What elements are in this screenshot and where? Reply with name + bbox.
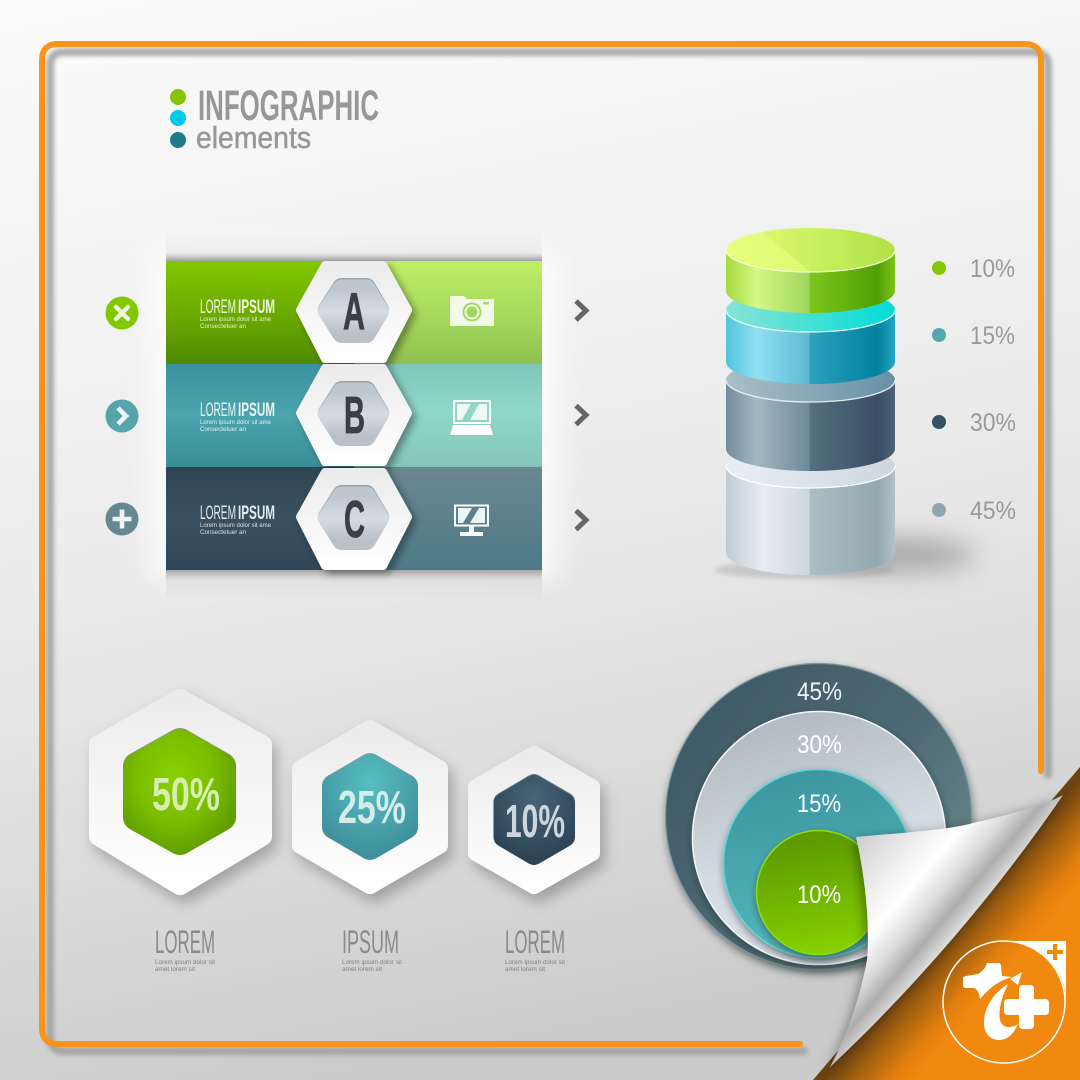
- row C icon: monitor: [455, 506, 488, 536]
- row B label: Consectetuer an: [200, 426, 246, 433]
- logo mark: t: [963, 963, 1012, 999]
- row B chevron: [576, 406, 586, 424]
- logo mark: arrow: [1010, 972, 1022, 985]
- caption LOREM 2: Lorem ipsum dolor sit: [505, 959, 565, 966]
- row B label: LOREM: [200, 400, 236, 421]
- panel: banner list: [106, 232, 586, 600]
- row C label: Consectetuer an: [200, 529, 246, 536]
- cylinder segment 10%: [726, 228, 895, 313]
- row B label: [200, 400, 275, 433]
- hexagon 25%: [301, 729, 439, 885]
- chart: nested circles: [666, 664, 972, 970]
- hexagon 10%: [476, 754, 592, 886]
- hexagon badge B: B: [344, 387, 365, 445]
- cylinder segment 45%: [726, 444, 895, 575]
- cylinder segment 30%: [726, 358, 895, 471]
- row B icon: next: [106, 400, 138, 432]
- circle 45%: [666, 664, 972, 970]
- row C icon: plus: [106, 502, 138, 536]
- legend 10%: [932, 255, 1015, 283]
- row A label: Consectetuer an: [200, 323, 246, 330]
- panel: hexagon percentages: [99, 699, 592, 973]
- hexagon 10%: 10%: [505, 795, 565, 847]
- circle 15%: [724, 770, 912, 958]
- row C label: [200, 503, 275, 536]
- hexagon badge C: [300, 472, 408, 566]
- hexagon 25%: 25%: [338, 781, 406, 833]
- row C label: Lorem ipsum dolor sit ame: [200, 522, 271, 529]
- legend 45%: 45%: [970, 497, 1016, 525]
- hexagon 50%: [99, 699, 262, 885]
- row B icon: laptop: [450, 401, 493, 435]
- caption IPSUM: IPSUM: [342, 924, 399, 960]
- legend 30%: [932, 409, 1016, 437]
- row A label: LOREM: [200, 297, 236, 318]
- caption LOREM: [155, 924, 215, 973]
- hexagon badge B: [300, 368, 408, 462]
- chart legend: [932, 255, 1016, 525]
- row B label: Lorem ipsum dolor sit ame: [200, 419, 271, 426]
- row C label: IPSUM: [238, 503, 275, 524]
- logo ring: [943, 941, 1065, 1063]
- caption LOREM: LOREM: [155, 924, 215, 960]
- caption LOREM 2: LOREM: [505, 924, 565, 960]
- circle 30%: 30%: [797, 731, 842, 759]
- caption IPSUM: amet lorem sit: [342, 966, 382, 973]
- legend 15%: [932, 322, 1015, 350]
- circle 10%: 10%: [797, 881, 841, 909]
- row C chevron: [576, 510, 586, 530]
- page curl: [830, 795, 1063, 1067]
- circle 10%: [756, 830, 880, 954]
- logo mark: plus: [1004, 985, 1049, 1029]
- legend 45%: [932, 497, 1016, 525]
- logo mark: stem: [984, 984, 1018, 1040]
- row A label: Lorem ipsum dolor sit ame: [200, 316, 271, 323]
- caption LOREM: amet lorem sit: [155, 966, 195, 973]
- row A: [106, 261, 586, 364]
- hexagon badge A: A: [343, 283, 365, 341]
- title block: [170, 82, 379, 155]
- row B: [106, 364, 586, 467]
- circle 15%: 15%: [797, 790, 841, 818]
- cylinder segment 15%: [726, 288, 895, 384]
- row A label: [200, 297, 275, 330]
- logo small plus: [1047, 944, 1063, 960]
- caption LOREM 2: amet lorem sit: [505, 966, 545, 973]
- row A label: IPSUM: [238, 297, 275, 318]
- row C: [106, 467, 586, 570]
- legend 10%: 10%: [970, 255, 1015, 283]
- row A icon: camera: [450, 296, 494, 326]
- row A icon: close: [106, 296, 138, 330]
- orange page corner: [813, 767, 1080, 1080]
- heading: elements: elements: [196, 120, 311, 155]
- heading: INFOGRAPHIC: INFOGRAPHIC: [198, 82, 379, 130]
- row A chevron: [576, 301, 586, 320]
- caption LOREM: Lorem ipsum dolor sit: [155, 959, 215, 966]
- chart: stacked cylinder: [715, 228, 975, 579]
- logo corner: [1004, 941, 1066, 1002]
- title dots: [170, 89, 186, 148]
- row C label: LOREM: [200, 503, 236, 524]
- circle 30%: [692, 712, 946, 964]
- hexagon 50%: 50%: [152, 768, 220, 820]
- row B label: IPSUM: [238, 400, 275, 421]
- legend 15%: 15%: [970, 322, 1015, 350]
- hexagon badge C: C: [344, 491, 365, 549]
- legend 30%: 30%: [970, 409, 1016, 437]
- hexagon badge A: [300, 265, 408, 359]
- circle 45%: 45%: [797, 678, 842, 706]
- logo: [943, 941, 1066, 1063]
- caption IPSUM: Lorem ipsum dolor sit: [342, 959, 402, 966]
- caption IPSUM: [342, 924, 402, 973]
- caption LOREM 2: [505, 924, 565, 973]
